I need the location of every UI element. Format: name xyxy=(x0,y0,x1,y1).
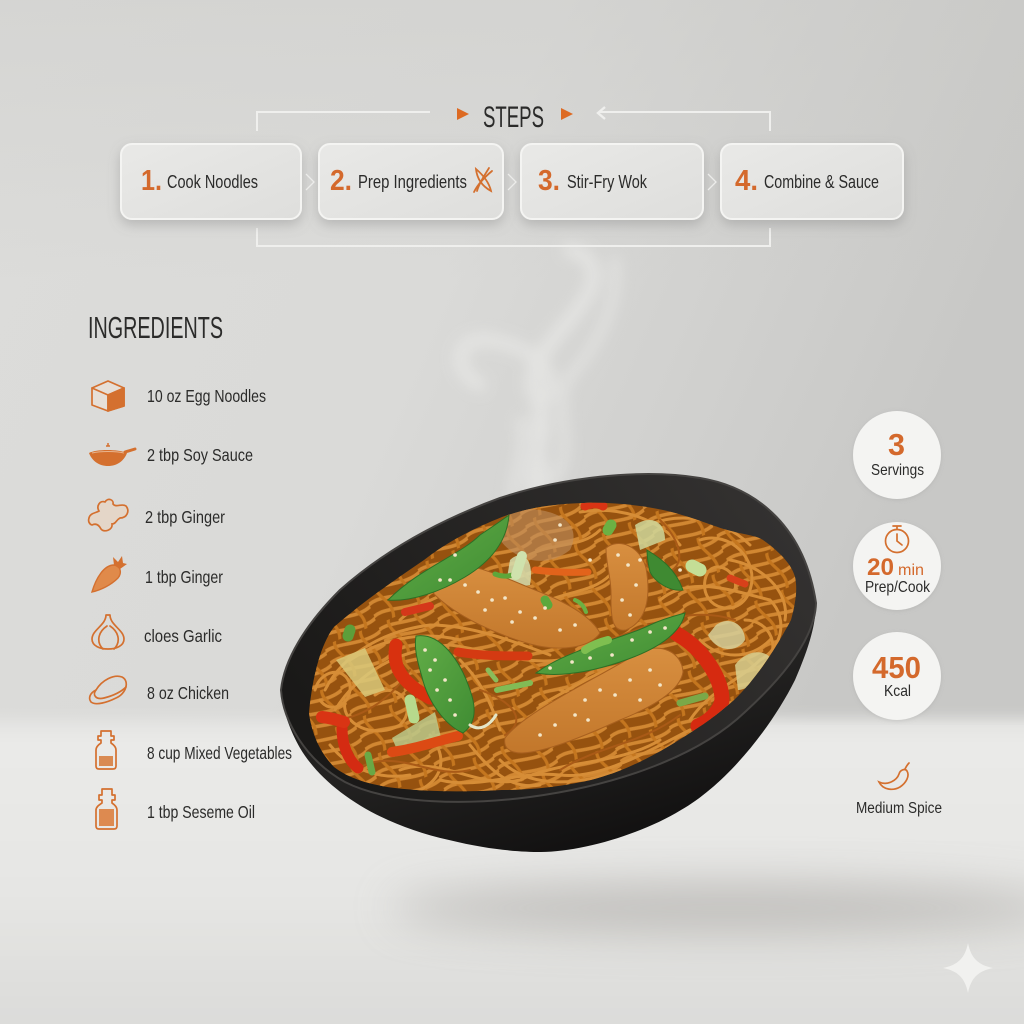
sesame seeds xyxy=(425,525,680,735)
icon: wok xyxy=(89,443,135,466)
icon: cube xyxy=(92,381,124,411)
step 4 card: Combine & Sauce xyxy=(764,171,879,192)
stat: prep and cook time: Prep/Cook xyxy=(865,579,931,596)
ingredient: chicken: 8 oz Chicken xyxy=(147,683,229,703)
stat: servings: 3 xyxy=(888,427,905,462)
stat: prep and cook time xyxy=(853,522,941,610)
ingredient: sesame oil: 1 tbp Seseme Oil xyxy=(147,802,255,822)
flow bracket: bottom xyxy=(257,228,770,246)
bowl body xyxy=(281,603,816,852)
ingredients heading: INGREDIENTS xyxy=(88,310,223,345)
step 2 card xyxy=(319,144,503,219)
ingredient: garlic: cloes Garlic xyxy=(144,626,222,646)
ingredient: mixed vegetables: 8 cup Mixed Vegetables xyxy=(147,743,292,763)
icon: carrot xyxy=(92,556,127,592)
ingredient: garlic xyxy=(92,615,222,649)
icon: chicken breast xyxy=(90,676,126,704)
step 3 card: Stir-Fry Wok xyxy=(567,171,648,192)
ingredient: soy sauce: 2 tbp Soy Sauce xyxy=(147,445,253,465)
bell pepper strips xyxy=(322,504,745,768)
stat: servings: Servings xyxy=(871,462,924,479)
icon: crossed knives xyxy=(474,168,492,192)
flow bracket: top xyxy=(257,107,770,131)
chicken strips xyxy=(433,544,683,753)
stat: calories: Kcal xyxy=(884,683,911,700)
icon: chili pepper xyxy=(879,763,909,789)
spice level: Medium Spice xyxy=(856,800,942,817)
stat: calories xyxy=(853,632,941,720)
noodles and toppings xyxy=(309,502,796,792)
stat: prep and cook time: 20 xyxy=(867,554,894,581)
scallions xyxy=(348,525,705,772)
step 4 card: 4. xyxy=(735,165,758,197)
icon: bottle xyxy=(96,789,117,829)
step 1 card: 1. xyxy=(141,165,162,197)
stat: servings xyxy=(853,411,941,499)
step 2 card: Prep Ingredients xyxy=(358,171,467,192)
snow peas xyxy=(388,515,685,733)
step 1 card xyxy=(121,144,301,219)
ingredient: ginger: 2 tbp Ginger xyxy=(145,507,225,527)
icon: ginger root xyxy=(89,499,128,531)
bowl shadow on the floor xyxy=(390,884,1024,932)
step 3 card: 3. xyxy=(538,165,560,197)
ingredient: egg noodles: 10 oz Egg Noodles xyxy=(147,386,266,406)
ingredient: mixed vegetables xyxy=(96,731,292,769)
icon: garlic bulb xyxy=(92,615,124,649)
icon: bottle xyxy=(96,731,116,769)
ingredient: sesame oil xyxy=(96,789,255,829)
ingredient: chicken xyxy=(90,676,229,704)
stat: calories: 450 xyxy=(872,650,921,685)
spice level xyxy=(856,763,942,817)
ingredient: carrot xyxy=(92,556,223,592)
steps heading: STEPS xyxy=(483,101,544,134)
step chevrons xyxy=(306,174,716,190)
step 3 card xyxy=(521,144,703,219)
icon: stopwatch xyxy=(886,526,908,552)
bowl xyxy=(281,474,816,852)
ingredient: carrot: 1 tbp Ginger xyxy=(145,567,223,587)
step 2 card: 2. xyxy=(330,165,352,197)
wilted cabbage xyxy=(336,509,775,752)
stat: prep and cook time: min xyxy=(898,562,924,579)
step 1 card: Cook Noodles xyxy=(167,171,258,192)
steam xyxy=(460,250,616,515)
bowl rim and interior xyxy=(281,474,816,802)
ingredient: egg noodles xyxy=(92,381,266,411)
ingredient: soy sauce xyxy=(89,443,253,466)
sparkle mark xyxy=(943,943,993,993)
ingredient: ginger xyxy=(89,499,225,531)
step 4 card xyxy=(721,144,903,219)
noodle strands xyxy=(315,510,786,790)
